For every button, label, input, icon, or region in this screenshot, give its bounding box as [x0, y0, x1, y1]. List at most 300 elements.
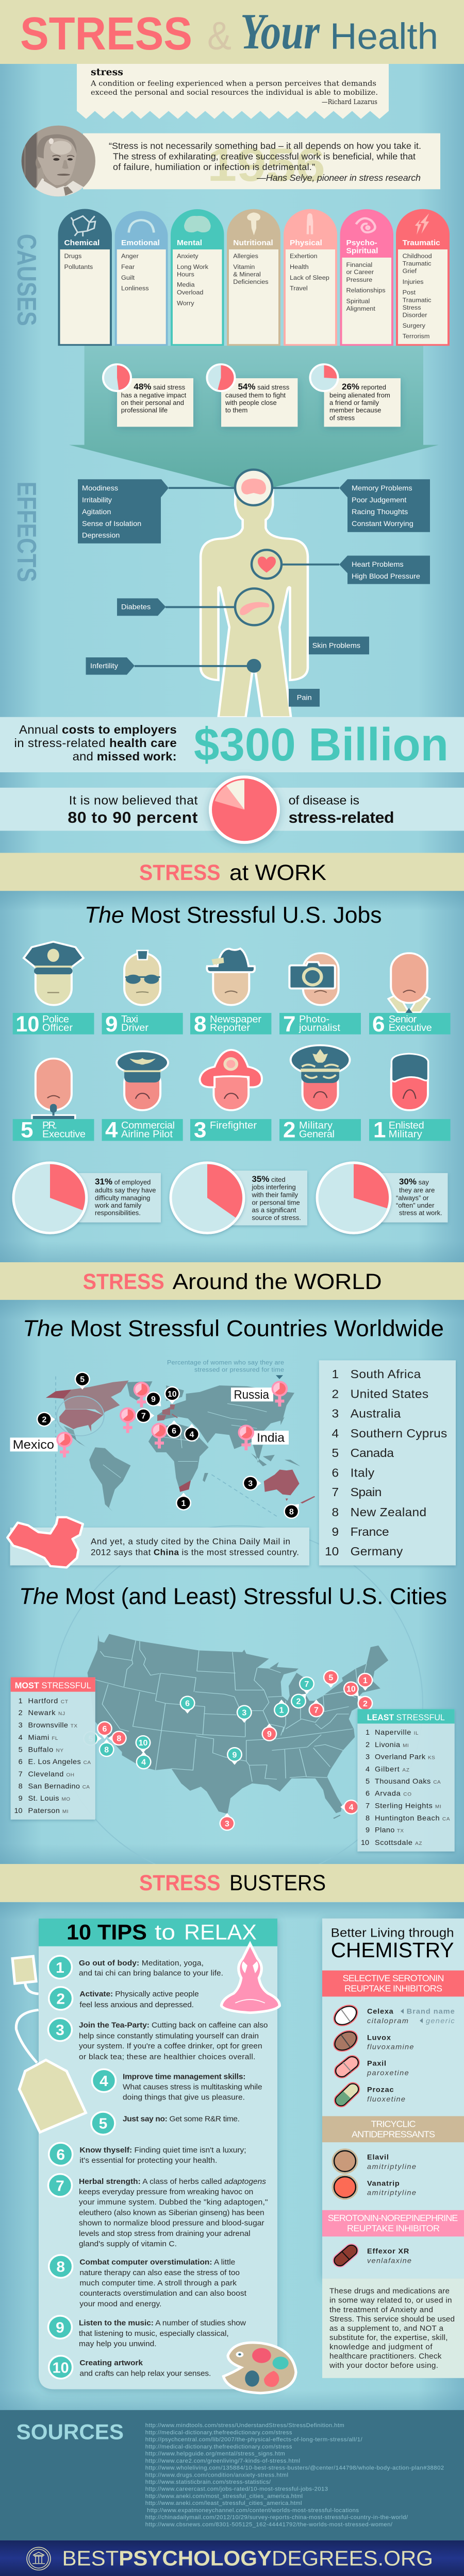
card: mental: Media: [177, 281, 195, 289]
panel: country ranking: South Africa: [351, 1367, 421, 1381]
drug: luvox: fluvoxamine: [367, 2043, 414, 2051]
label: memory effects: Constant Worrying: [352, 520, 413, 528]
tip 8: nature therapy can also ease the stress of too: [79, 2268, 240, 2277]
pin: coral 3: [220, 1813, 235, 1831]
pin: coral 1: 1: [363, 1676, 368, 1685]
body figure: [201, 488, 308, 717]
tip 7: levels and stop stress from draining your adrenal: [79, 2229, 251, 2238]
pin: 6 italy: [167, 1420, 182, 1438]
label: 10 police officer: Officer: [42, 1022, 73, 1033]
pin: teal 7: 7: [305, 1680, 309, 1689]
icon: lightning bolts: [415, 213, 429, 235]
tip 1: Go out of body: Meditation, yoga,: [79, 1959, 204, 1968]
heading: most stressful countries: The Most Stressful Countries Worldwide: [23, 1315, 444, 1341]
label: pain: [289, 689, 320, 707]
panel: least stressful cities: 3: [366, 1753, 370, 1761]
label: 3 firefighter: 3: [194, 1118, 206, 1142]
card: psycho-spiritual: or Career: [346, 268, 374, 276]
label: 9 taxi driver: Taxi: [121, 1014, 138, 1025]
card: traumatic: Traumatic: [403, 239, 440, 247]
disclaimer text: in some way related to, or used in: [329, 2296, 452, 2304]
panel: most stressful cities: Newark NJ: [28, 1709, 65, 1717]
card: psycho-spiritual: Psycho-: [346, 239, 377, 247]
disclaimer text: with your doctor before using.: [329, 2361, 438, 2370]
tip 9: Listen to the music: A number of studies show: [79, 2319, 246, 2327]
pin: teal 6: [180, 1696, 195, 1714]
stat band: disease: stress-related: [289, 809, 394, 826]
card: traumatic: Stress: [403, 304, 421, 311]
panel: most stressful cities: 1: [19, 1697, 23, 1705]
panel: most stressful cities: Cleveland OH: [28, 1770, 74, 1778]
pin: teal 1: [274, 1700, 289, 1717]
panel: country ranking: 7: [332, 1486, 339, 1499]
tip 4: [92, 2069, 262, 2102]
drug: prozac: fluoxetine: [367, 2095, 405, 2104]
drug: paxil: [332, 2053, 409, 2081]
stat: 35 percent: or personal time: [252, 1199, 300, 1206]
source links: http://medical-dictionary.thefreedictionary.com/stress: [145, 2444, 292, 2450]
stat card: 54 percent: [207, 364, 297, 427]
card: traumatic: Grief: [403, 267, 417, 275]
tip 3: Join the Tea-Party: Cutting back on caffeine can also: [79, 2021, 268, 2029]
label: 7 photojournalist: journalist: [299, 1022, 341, 1033]
pin: coral 4: [340, 1800, 359, 1815]
disclaimer text: as a supplement to, and NOT a: [329, 2324, 444, 2333]
panel: least stressful cities: 8: [366, 1815, 370, 1822]
panel: least stressful cities: 2: [366, 1741, 370, 1749]
card: chemical: Pollutants: [64, 263, 93, 270]
portrait of Hans Selye: [21, 125, 96, 197]
pin: teal 9: [227, 1747, 242, 1765]
label: 4 commercial airline pilot: 4: [105, 1118, 118, 1142]
label: 2 military general: [279, 1118, 361, 1142]
quote: Hans Selye: The stress of exhilarating, creative successful work is beneficial, while that: [113, 151, 416, 162]
label: 7 photojournalist: Photo-: [299, 1014, 329, 1025]
stat card: 48 percent: professional life: [121, 406, 168, 414]
band: SNRI: [322, 2210, 464, 2236]
stat card: 26 percent: [310, 364, 401, 427]
label: memory effects: [273, 479, 430, 532]
tip 1: 1: [56, 1959, 64, 1976]
face: military general: [291, 1045, 350, 1110]
stat card: 26 percent: a friend or family: [329, 399, 379, 406]
panel: least stressful cities: Huntington Beach CA: [375, 1815, 450, 1822]
tip 8: much computer time. A stroll through a park: [79, 2279, 237, 2287]
effect labels: [78, 479, 430, 707]
tip 7: [48, 2174, 268, 2248]
label: 9 taxi driver: [102, 1012, 183, 1037]
callout: mexico: [10, 1433, 72, 1458]
card: emotional: Lonliness: [121, 285, 149, 292]
disclaimer text: the treatment of Anxiety and: [329, 2306, 433, 2314]
card: traumatic: [396, 209, 450, 346]
callout: russia: Russia: [234, 1388, 269, 1402]
pin: 8 new zealand: 8: [289, 1508, 294, 1516]
card: traumatic: Terrorism: [403, 333, 429, 340]
pin: coral 2: 2: [363, 1700, 368, 1708]
pin: coral 7: [308, 1700, 324, 1717]
panel: country ranking: 9: [332, 1525, 339, 1539]
pin: 4 cyprus: [184, 1423, 200, 1442]
card: nutritional: Vitamin: [233, 263, 255, 270]
stat card: 26 percent: of stress: [329, 414, 355, 421]
face: photojournalist: [289, 953, 339, 1005]
panel: least stressful cities: LEAST STRESSFUL: [367, 1712, 445, 1722]
label: 1 enlisted military: [369, 1118, 451, 1142]
panel: country ranking: Canada: [351, 1446, 394, 1460]
panel: most stressful cities: 2: [19, 1709, 23, 1717]
icon: yoga figure: [221, 1944, 279, 2013]
pin: coral 5: [323, 1670, 339, 1688]
tip 8: Combat computer overstimulation: A little: [79, 2258, 235, 2266]
face: taxi driver: [124, 951, 160, 1005]
source links: [145, 2422, 444, 2528]
quote: Hans Selye: [83, 133, 440, 191]
stat: 35 percent: [171, 1163, 307, 1233]
panel: least stressful cities: 1: [366, 1728, 370, 1737]
drug: elavil: [333, 2149, 416, 2173]
definition of stress: exceed the personal and social resources the individual is able to mobilize.: [91, 89, 378, 97]
panel: most stressful cities: 5: [19, 1746, 23, 1754]
section banner: stress busters: STRESS: [139, 1871, 221, 1895]
sources panel: [0, 2410, 464, 2540]
sources panel: SOURCES: [16, 2420, 124, 2444]
panel: country ranking: 1: [332, 1367, 339, 1381]
stat card: 54 percent: with people close: [225, 399, 277, 406]
card: traumatic: Traumatic: [403, 260, 431, 267]
face: senior executive: [388, 953, 429, 1013]
pin: 10 germany: [164, 1386, 180, 1404]
pin: teal 7: [299, 1676, 314, 1694]
title banner: Health: [330, 16, 438, 57]
stat band: disease: 80 to 90 percent: [68, 809, 198, 826]
stat card: 54 percent: caused them to fight: [225, 392, 286, 399]
panel: country ranking: Australia: [351, 1407, 401, 1420]
stat: 35 percent: jobs interfering: [251, 1183, 296, 1191]
label: 4 commercial airline pilot: [102, 1118, 183, 1142]
footer logo bar: [0, 2540, 464, 2576]
source links: http://www.expatmoneychannel.com/content/worlds-most-stressful-locations: [147, 2507, 359, 2514]
icon: columned seal: [27, 2547, 51, 2570]
card: chemical: Drugs: [64, 252, 81, 260]
source links: http://www.statisticbrain.com/stress-statistics/: [145, 2479, 271, 2485]
card: mental: Anxiety: [177, 252, 198, 260]
pin: 3 australia: [243, 1476, 261, 1490]
big arrow from causes to body: [69, 346, 439, 487]
stat: 30 percent: [317, 1163, 448, 1233]
card: emotional: Anger: [121, 252, 139, 260]
panel: country ranking: Germany: [351, 1545, 403, 1558]
stat: 30 percent: “always” or: [396, 1194, 429, 1201]
stat band: disease: [0, 777, 464, 842]
stat: 31 percent: 31% of employed: [95, 1177, 151, 1187]
card: mental: Mental: [177, 239, 202, 247]
label: mood effects: Irritability: [82, 496, 112, 504]
card: nutritional: Allergies: [233, 252, 258, 260]
vertical label: effects: EFFECTS: [12, 482, 42, 582]
label: 7 photojournalist: [279, 1012, 361, 1037]
label: mood effects: Moodiness: [82, 484, 118, 493]
section banner: stress at work: at WORK: [229, 861, 326, 885]
map legend caption: Percentage of women who say they are: [167, 1359, 284, 1366]
label: 3 firefighter: [190, 1118, 271, 1142]
panel: country ranking: 10: [325, 1545, 339, 1558]
stat card: 26 percent: being alienated from: [329, 392, 390, 399]
pin: teal 5: [83, 1731, 102, 1746]
callout: mexico: Mexico: [13, 1438, 54, 1452]
panel: country ranking: 4: [332, 1427, 339, 1440]
panel: least stressful cities: Livonia MI: [375, 1741, 409, 1749]
stat band: 300 billion: Annual costs to employers: [19, 723, 177, 736]
pin: coral 9: [261, 1723, 277, 1741]
pin: 4 cyprus: 4: [190, 1431, 194, 1439]
tip 2: Activate: Physically active people: [79, 1990, 199, 1998]
card: psycho-spiritual: Relationships: [346, 287, 386, 294]
card: psycho-spiritual: Pressure: [346, 276, 372, 283]
label: mood effects: [78, 479, 235, 544]
footer logo bar: BESTPSYCHOLOGYDEGREES.ORG: [62, 2547, 433, 2570]
tip 8: your mood and energy.: [79, 2300, 161, 2308]
callout: india: [239, 1426, 289, 1450]
panel: 10 tips to relax: 10 TIPS: [67, 1920, 147, 1944]
pin: coral 4: 4: [349, 1803, 354, 1812]
panel: least stressful cities: 5: [366, 1777, 370, 1786]
pin: 10 germany: 10: [168, 1390, 177, 1399]
stat card: 26 percent: member because: [329, 406, 381, 414]
effect: heart circle: [252, 550, 281, 579]
panel: most stressful cities: MOST STRESSFUL: [15, 1680, 91, 1690]
source links: http://www.wholeliving.com/135884/10-best-stress-busters/@center/144798/whole-body-action-plan#38802: [145, 2465, 444, 2471]
panel: least stressful cities: Overland Park KS: [375, 1753, 435, 1761]
band: SSRI: REUPTAKE INHIBITORS: [344, 1984, 442, 1994]
label: infertility: Infertility: [90, 662, 119, 670]
stat band: 300 billion: $300 Billion: [194, 719, 449, 771]
tip 1: [48, 1956, 223, 1978]
label: 5 PR executive: Executive: [42, 1129, 86, 1140]
title banner: STRESS: [20, 8, 192, 60]
pin: 1 south africa: [176, 1493, 191, 1511]
stat band: 300 billion: in stress-related health care: [14, 736, 177, 750]
pin: 5 canada: 5: [80, 1376, 85, 1384]
panel: least stressful cities: 10: [361, 1839, 369, 1847]
drug: vanatrip: Vanatrip: [367, 2180, 400, 2188]
stat card: 48 percent: [103, 364, 193, 427]
panel: most stressful cities: San Bernadino CA: [28, 1783, 90, 1791]
panel: least stressful cities: Thousand Oaks CA: [375, 1777, 441, 1786]
panel: least stressful cities: Gilbert AZ: [375, 1766, 409, 1773]
pin: coral 10: 10: [346, 1685, 356, 1694]
card: emotional: Fear: [121, 263, 135, 270]
pin: 2 united states: 2: [42, 1416, 47, 1424]
face: newspaper reporter: [207, 948, 255, 1005]
stat card: 48 percent: has a negative impact: [121, 392, 187, 399]
tip 10: Creating artwork: [79, 2359, 143, 2367]
stat: 30 percent: 30% say: [399, 1177, 429, 1187]
stat: 35 percent: with their family: [251, 1191, 299, 1199]
card: traumatic: Disorder: [403, 312, 427, 318]
tip 7: shown to normalize blood pressure and blood-sugar: [79, 2219, 264, 2227]
tip 4: Improve time management skills:: [123, 2073, 245, 2081]
card: psycho-spiritual: Spiritual: [346, 298, 370, 304]
pin: coral 9: 9: [267, 1730, 272, 1739]
panel: 10 tips to relax: to: [155, 1920, 175, 1944]
world map: [46, 1376, 315, 1519]
face: police officer: [24, 942, 84, 1005]
label: 8 newspaper reporter: Reporter: [210, 1022, 250, 1033]
pin: teal 5: 5: [89, 1735, 93, 1743]
card: emotional: Emotional: [121, 239, 160, 247]
label: pain: Pain: [297, 694, 312, 702]
definition of stress: stress: [91, 67, 123, 78]
tip 3: 3: [56, 2022, 64, 2039]
panel: country ranking: 5: [332, 1446, 339, 1460]
label: memory effects: Racing Thoughts: [352, 508, 408, 516]
tip 10: [49, 2356, 211, 2379]
label: skin problems: Skin Problems: [312, 642, 360, 650]
drug: effexor: venlafaxine: [367, 2257, 411, 2265]
tip 5: [91, 2112, 240, 2134]
label: 6 senior executive: 6: [372, 1012, 385, 1037]
stat band: disease: of disease is: [289, 794, 359, 807]
label: 1 enlisted military: Military: [389, 1129, 422, 1140]
stat: 31 percent: difficulty managing: [95, 1194, 150, 1201]
panel: least stressful cities: Sterling Heights MI: [375, 1802, 441, 1810]
map legend caption: [167, 1359, 284, 1379]
pie: 80 to 90 percent: [210, 777, 278, 842]
label: mood effects: Sense of Isolation: [82, 520, 141, 528]
panel: least stressful cities: Plano TX: [375, 1826, 404, 1835]
pin: coral 8: 8: [117, 1735, 122, 1743]
band: tricyclic antidepressants: TRICYCLIC: [371, 2119, 416, 2129]
drug: celexa: citalopram: [367, 2017, 408, 2025]
pin: coral 7: 7: [314, 1706, 319, 1715]
face: enlisted military: [391, 1054, 428, 1110]
disclaimer text: substitute for, the expertise, skill,: [329, 2333, 448, 2342]
label: 1 enlisted military: 1: [373, 1118, 386, 1142]
map legend caption: stressed or pressured for time: [194, 1366, 284, 1373]
card: psycho-spiritual: Spiritual: [346, 247, 378, 255]
tip 7: your immune system. Dubbed the "king adaptogen,": [79, 2198, 268, 2207]
us map: [88, 1634, 388, 1819]
pin: 7 spain: [136, 1408, 154, 1423]
source links: http://www.care2.com/greenliving/7-kinds-of-stress.html: [145, 2458, 300, 2464]
drug: elavil: Elavil: [367, 2154, 389, 2162]
drug: celexa: generic: [426, 2017, 455, 2025]
panel: 10 tips to relax: RELAX: [184, 1920, 257, 1944]
cause card icons: [71, 212, 429, 236]
pin: coral 2: [352, 1691, 376, 1714]
panel: causes cards: [58, 209, 450, 346]
icon: brain: [184, 216, 211, 232]
pin: 7 spain: 7: [141, 1412, 146, 1420]
callout: china: And yet, a study cited by the China Daily Mail in: [91, 1537, 290, 1547]
card: traumatic: Injuries: [403, 278, 423, 285]
panel: country ranking: Italy: [351, 1466, 374, 1480]
icon: spiral: [356, 218, 375, 232]
band: SSRI: SELECTIVE SEROTONIN: [342, 1973, 444, 1984]
tip 8: [49, 2255, 247, 2308]
panel: country ranking: New Zealand: [351, 1505, 426, 1519]
label: 8 newspaper reporter: Newspaper: [210, 1014, 261, 1025]
drug: celexa: Brand name: [407, 2008, 455, 2016]
tip 10: 10: [53, 2360, 69, 2376]
stat band: 300 billion: and missed work:: [73, 750, 177, 763]
pin: 9 france: 9: [151, 1395, 156, 1404]
pin: coral 3: 3: [225, 1820, 229, 1828]
panel: least stressful cities: 6: [366, 1790, 370, 1798]
card: mental: [171, 209, 224, 346]
card: emotional: [115, 211, 168, 346]
panel: better living through chemistry: CHEMISTRY: [331, 1939, 454, 1962]
label: 4 commercial airline pilot: Commercial: [121, 1120, 175, 1131]
tip 10: and crafts can help relax your senses.: [79, 2369, 211, 2378]
pin: teal 4: [136, 1752, 152, 1769]
effect: infertility marker: [246, 659, 261, 673]
band: tricyclic antidepressants: ANTIDEPRESSANTS: [352, 2129, 435, 2139]
panel: most stressful cities: 7: [19, 1770, 23, 1778]
city pins: [83, 1670, 376, 1831]
title banner: &: [207, 14, 231, 58]
card: nutritional: & Mineral: [233, 271, 261, 278]
tip 5: Just say no: Get some R&R time.: [123, 2115, 240, 2124]
tip 2: [49, 1987, 199, 2010]
tip 6: [49, 2143, 246, 2165]
label: memory effects: Memory Problems: [352, 484, 412, 493]
pin: teal 3: [237, 1705, 252, 1723]
tea bag and yoga decorations: [12, 1944, 279, 2132]
tip 4: 4: [100, 2073, 108, 2090]
stat: 30 percent: “often” under: [396, 1201, 435, 1209]
drug: luvox: Luvox: [367, 2034, 391, 2042]
card: physical: [284, 209, 337, 346]
work stat pies: [13, 1163, 448, 1233]
label: 2 military general: General: [299, 1129, 335, 1140]
tip 7: keeps everyday pressure from wreaking havoc on: [79, 2188, 253, 2196]
quote: Hans Selye: 1956: [207, 139, 325, 191]
source links: http://www.drugs.com/condition/anxiety-stress.html: [145, 2472, 288, 2478]
pin: teal 4: 4: [141, 1758, 146, 1767]
panel: better living through chemistry: Better Living through: [331, 1926, 454, 1940]
callout: russia: [231, 1382, 287, 1406]
label: memory effects: Poor Judgement: [352, 496, 406, 504]
panel: most stressful cities: Brownsville TX: [28, 1721, 77, 1730]
pin: teal 9: 9: [233, 1751, 237, 1759]
label: 5 PR executive: 5: [21, 1118, 33, 1142]
drug: vanatrip: amitriptyline: [367, 2189, 416, 2197]
panel: country ranking: France: [351, 1525, 389, 1539]
source links: http://www.aneki.com/least_stressful_cities_america.html: [145, 2500, 302, 2506]
pin: coral 1: [357, 1673, 373, 1690]
pin: 8 new zealand: [280, 1499, 305, 1522]
source links: http://chinadailymail.com/2012/10/29/survey-reports-china-most-stressful-country-in-the-world/: [145, 2515, 408, 2521]
panel: least stressful cities: 7: [366, 1802, 370, 1810]
tip 4: doing things that give us pleasure.: [123, 2093, 245, 2102]
drug: paxil: paroxetine: [367, 2069, 409, 2077]
tip 1: and tai chi can bring balance to your life.: [79, 1969, 223, 1978]
source links: http://psychcentral.com/lib/2007/the-physical-effects-of-long-term-stress/all/1/: [145, 2437, 363, 2443]
stat: 30 percent: stress at work.: [399, 1209, 442, 1217]
face: PR executive: [32, 1059, 75, 1120]
label: mood effects: Depression: [82, 532, 120, 540]
pin: teal 2: [288, 1688, 311, 1711]
quote: Hans Selye: —Hans Selye, pioneer in stress research: [256, 173, 421, 183]
tip 9: that listening to music, especially classical,: [79, 2329, 229, 2338]
map callouts: [10, 1382, 289, 1458]
card: emotional: Guilt: [121, 274, 135, 281]
card: nutritional: [227, 209, 280, 346]
band: SNRI: REUPTAKE INHIBITOR: [347, 2223, 440, 2233]
icon: body: [307, 213, 313, 234]
